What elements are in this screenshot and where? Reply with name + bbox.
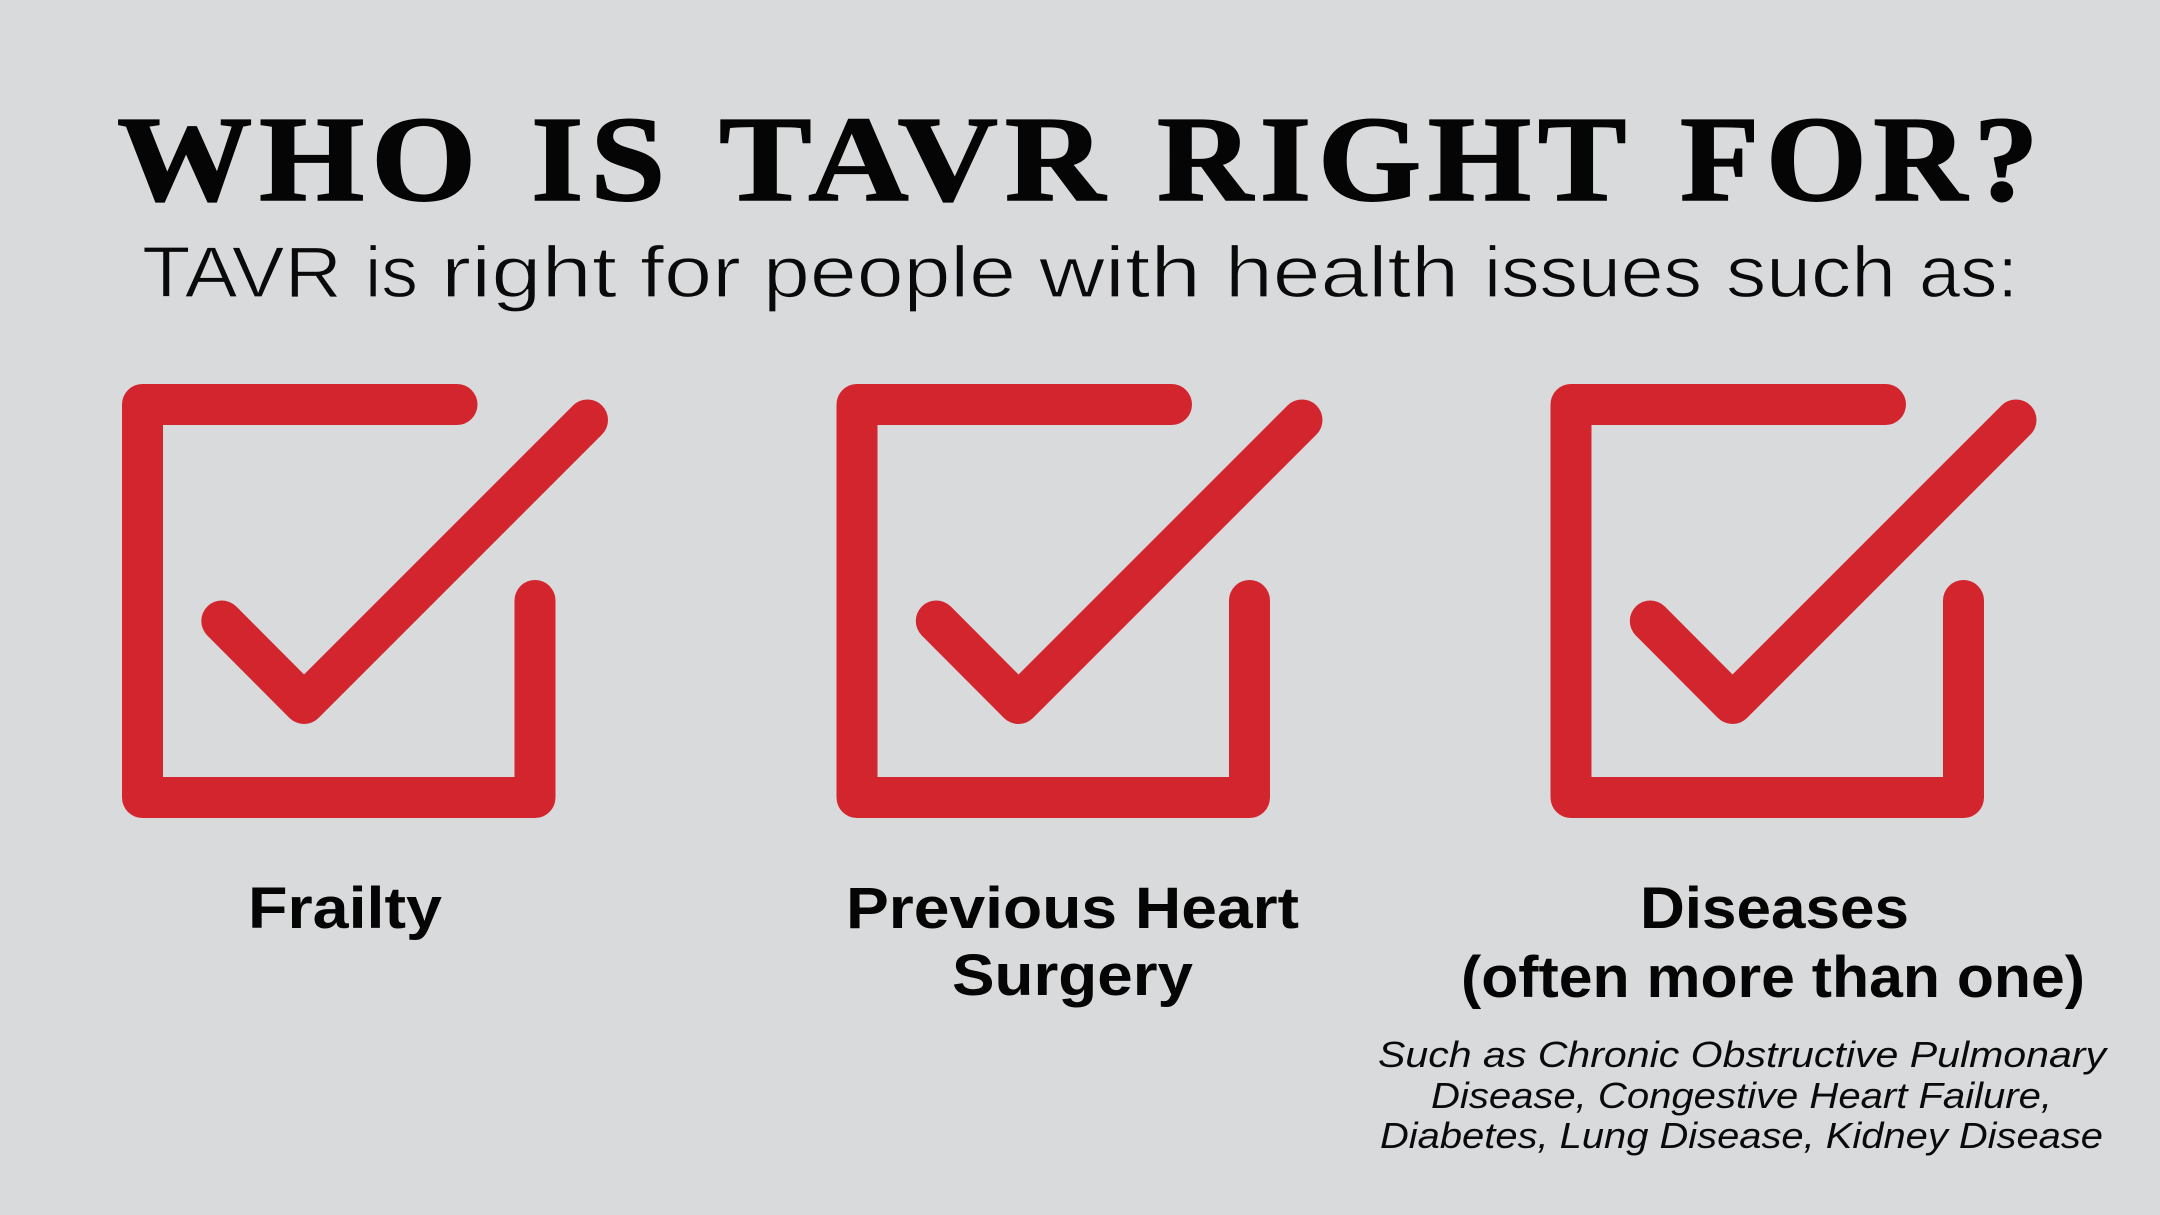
note: example diseases: Disease, Congestive Heart Failure,: [1431, 1075, 2052, 1116]
note: example diseases: Such as Chronic Obstructive Pulmonary: [1378, 1034, 2108, 1075]
note: example diseases: [1378, 1034, 2108, 1156]
subtitle: TAVR: [142, 233, 342, 313]
icon: red checkbox: [857, 404, 1302, 798]
label: frailty: Frailty: [248, 876, 442, 941]
subtitle: [142, 233, 2018, 313]
title: TAVR: [719, 92, 1112, 227]
panel: diseases: [1378, 404, 2108, 1156]
panel: previous heart surgery: [846, 404, 1302, 1008]
label: diseases: [1461, 876, 2085, 1010]
label: previous heart surgery: [846, 876, 1299, 1008]
icon: red checkbox: [142, 404, 588, 798]
subtitle: right: [441, 233, 617, 313]
subtitle: with: [1038, 233, 1201, 313]
icon: red checkbox: [1571, 404, 2016, 798]
title: WHO: [117, 92, 483, 227]
title: RIGHT: [1157, 92, 1633, 227]
title: FOR?: [1680, 92, 2045, 227]
label: previous heart surgery: Previous Heart: [846, 876, 1299, 941]
subtitle: issues: [1484, 233, 1702, 313]
title: IS: [531, 92, 672, 227]
label: diseases: (often more than one): [1461, 945, 2085, 1010]
subtitle: for: [640, 233, 741, 313]
subtitle: is: [365, 233, 418, 313]
title: [117, 92, 2045, 227]
label: diseases: Diseases: [1640, 876, 1909, 941]
label: previous heart surgery: Surgery: [952, 943, 1193, 1008]
panel: frailty: [142, 404, 588, 941]
subtitle: as:: [1919, 233, 2018, 313]
subtitle: such: [1726, 233, 1896, 313]
note: example diseases: Diabetes, Lung Disease, Kidney Disease: [1380, 1115, 2103, 1156]
subtitle: people: [763, 233, 1016, 313]
subtitle: health: [1225, 233, 1459, 313]
